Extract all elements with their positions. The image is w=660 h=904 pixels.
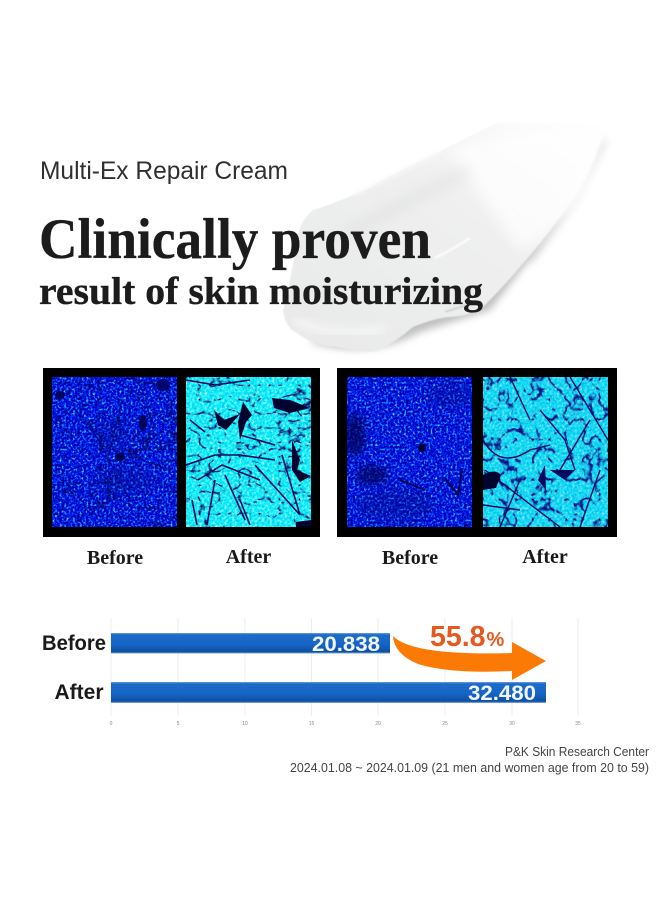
label: before: Before <box>87 547 143 569</box>
label: after: After <box>226 546 271 568</box>
heading line 2: result of skin moisturizing <box>39 270 483 313</box>
frame <box>43 368 320 537</box>
source note <box>290 744 650 775</box>
after image <box>186 377 311 527</box>
bar: before <box>111 632 390 656</box>
axis tick labels <box>110 721 581 727</box>
axis tick labels: 15 <box>309 721 314 727</box>
axis tick labels: 25 <box>442 721 448 727</box>
arrow: increase <box>393 636 546 680</box>
main heading <box>39 208 483 313</box>
bar chart <box>42 618 581 727</box>
label: after: After <box>522 546 568 568</box>
frame <box>337 368 617 537</box>
bar: after <box>111 681 546 705</box>
after image <box>483 377 608 527</box>
bar: before: 20.838 <box>312 632 380 656</box>
before image <box>52 377 177 527</box>
axis tick labels: 0 <box>110 721 113 727</box>
label: before: Before <box>382 547 438 569</box>
product name: Multi-Ex Repair Cream <box>40 157 288 185</box>
infographic canvas <box>40 140 649 774</box>
source line 1: P&K Skin Research Center <box>505 744 650 759</box>
axis tick labels: 5 <box>177 721 180 727</box>
category label: after: After <box>54 681 104 704</box>
before image <box>345 377 474 527</box>
cream swatch <box>283 123 606 351</box>
source line 2: 2024.01.08 ~ 2024.01.09 (21 men and women age from 20 to 59) <box>290 760 649 775</box>
axis tick labels: 20 <box>375 721 381 727</box>
callout: 55.8 percent: 55.8% <box>430 621 504 653</box>
panel: skin comparison right <box>337 368 617 569</box>
axis tick labels: 10 <box>242 721 248 727</box>
axis tick labels: 35 <box>575 721 581 727</box>
heading line 1: Clinically proven <box>39 208 431 271</box>
bar: after: 32.480 <box>468 681 536 705</box>
panel: skin comparison left <box>43 368 320 569</box>
category label: before: Before <box>42 632 106 655</box>
axis tick labels: 30 <box>509 721 515 727</box>
